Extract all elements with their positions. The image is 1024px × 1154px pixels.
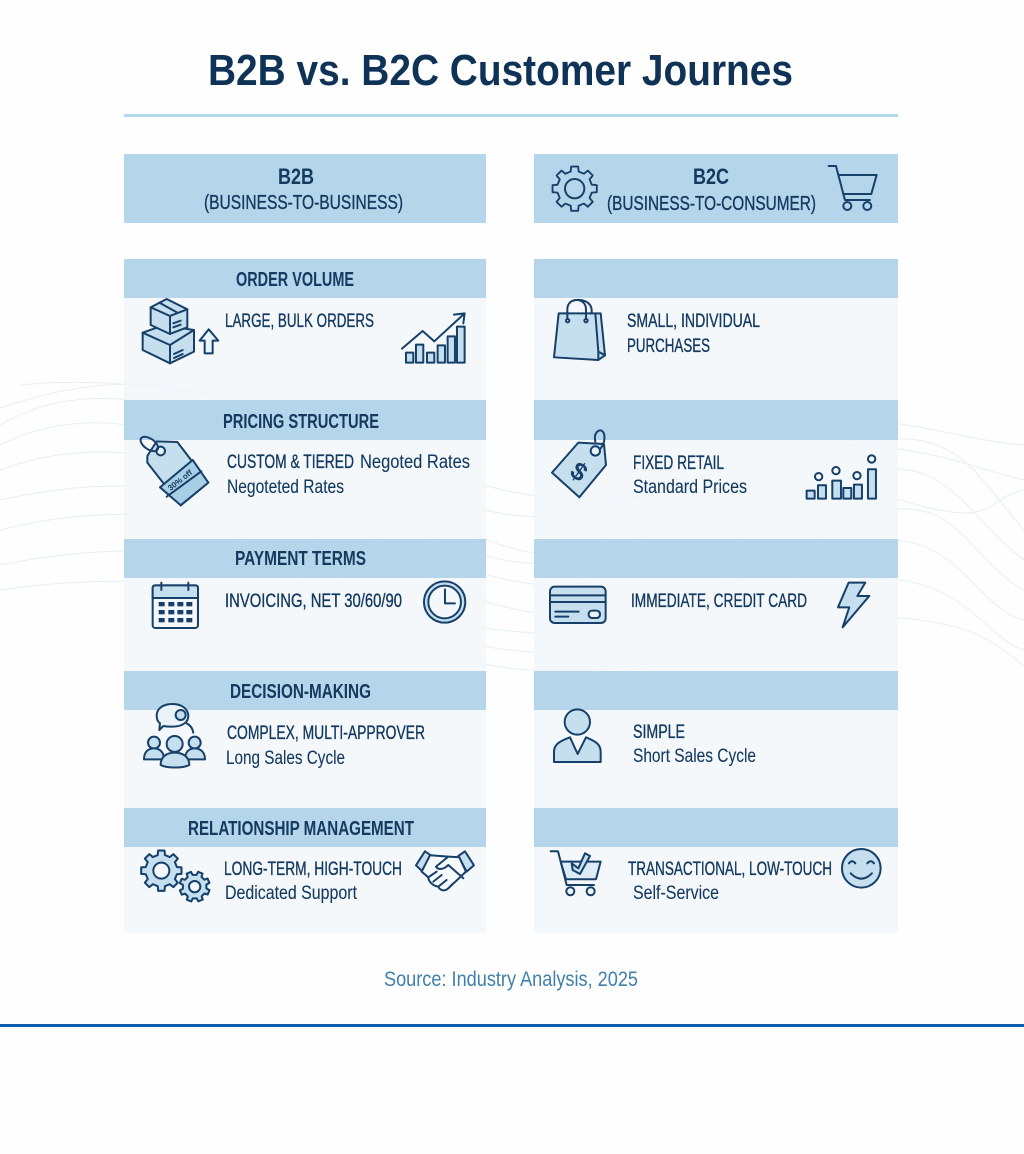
row: pricing structure (B2B): Negoteted Rates — [227, 477, 344, 498]
row: relationship management (B2B): Dedicated Support — [225, 883, 358, 904]
row: pricing structure (B2B): Negoted Rates — [360, 452, 470, 473]
B2B column header: B2B — [278, 164, 314, 189]
icon: cart with check — [551, 851, 601, 895]
row: pricing structure (B2B): CUSTOM & TIERED — [227, 452, 354, 473]
icon: calendar — [153, 583, 198, 628]
row: order volume (B2B): LARGE, BULK ORDERS — [225, 311, 374, 332]
icon: discount price tag — [138, 434, 208, 505]
row: order volume (B2B) — [124, 259, 486, 400]
icon: clock — [424, 581, 465, 623]
row: pricing structure (B2B): PRICING STRUCTURE — [223, 411, 379, 433]
icon: dollar price tag — [552, 430, 606, 497]
row: decision-making (B2B) — [124, 671, 486, 808]
icon: smiley face — [842, 849, 881, 888]
row: decision-making (B2C): Short Sales Cycle — [633, 746, 756, 767]
icon: group with speech bubble — [144, 704, 205, 767]
icon: shopping cart — [829, 166, 877, 210]
B2B column header: (BUSINESS-TO-BUSINESS) — [204, 192, 403, 214]
row: decision-making (B2B): COMPLEX, MULTI-APPROVER — [227, 723, 425, 744]
row: relationship management (B2B) — [124, 808, 486, 933]
row: relationship management (B2C): Self-Service — [633, 883, 719, 904]
icon: lightning bolt — [838, 583, 869, 627]
row: payment terms (B2B) — [124, 539, 486, 671]
icon: stacked boxes with up arrow — [143, 299, 218, 363]
icon: rising bar chart — [402, 313, 465, 363]
row: pricing structure (B2C): Standard Prices — [633, 477, 747, 498]
B2C column header: (BUSINESS-TO-CONSUMER) — [607, 193, 816, 215]
panel: B2B column — [124, 154, 486, 933]
row: relationship management (B2C): TRANSACTIONAL, LOW-TOUCH — [628, 859, 832, 880]
B2B column header — [124, 154, 486, 223]
icon: gear — [553, 167, 597, 211]
row: payment terms (B2C) — [534, 539, 898, 671]
row: decision-making (B2C): SIMPLE — [633, 722, 685, 743]
row: decision-making (B2B): DECISION-MAKING — [230, 681, 371, 703]
row: order volume (B2C): PURCHASES — [627, 336, 710, 357]
row: decision-making (B2B): Long Sales Cycle — [226, 748, 345, 769]
icon: handshake — [416, 851, 474, 890]
icon: person — [554, 709, 601, 762]
row: pricing structure (B2B) — [124, 400, 486, 539]
icon: gears — [141, 850, 214, 906]
icon: bars with dots — [807, 455, 876, 499]
bottom rule — [0, 1024, 1024, 1027]
panel: B2C column — [534, 154, 898, 933]
icon: dollar price tag: $ — [565, 457, 592, 488]
icon: discount price tag: 30% off — [166, 468, 194, 493]
row: payment terms (B2B): INVOICING, NET 30/60/90 — [225, 591, 402, 612]
title: B2B vs. B2C Customer Journes — [208, 46, 793, 95]
row: relationship management (B2C) — [534, 808, 898, 933]
row: pricing structure (B2C): FIXED RETAIL — [633, 453, 724, 474]
icon: shopping bag — [554, 300, 605, 360]
row: decision-making (B2C) — [534, 671, 898, 808]
row: payment terms (B2C): IMMEDIATE, CREDIT CARD — [631, 591, 807, 612]
row: payment terms (B2B): PAYMENT TERMS — [235, 548, 366, 570]
source note: Source: Industry Analysis, 2025 — [384, 968, 638, 991]
B2C column header — [534, 154, 898, 223]
row: order volume (B2C) — [534, 259, 898, 400]
icon: credit card — [550, 587, 606, 623]
row: order volume (B2B): ORDER VOLUME — [236, 269, 354, 291]
row: relationship management (B2B): RELATIONSHIP MANAGEMENT — [188, 818, 414, 840]
row: relationship management (B2B): LONG-TERM, HIGH-TOUCH — [224, 859, 402, 880]
B2C column header: B2C — [693, 164, 729, 189]
row: order volume (B2C): SMALL, INDIVIDUAL — [627, 311, 760, 332]
row: pricing structure (B2C) — [534, 400, 898, 539]
